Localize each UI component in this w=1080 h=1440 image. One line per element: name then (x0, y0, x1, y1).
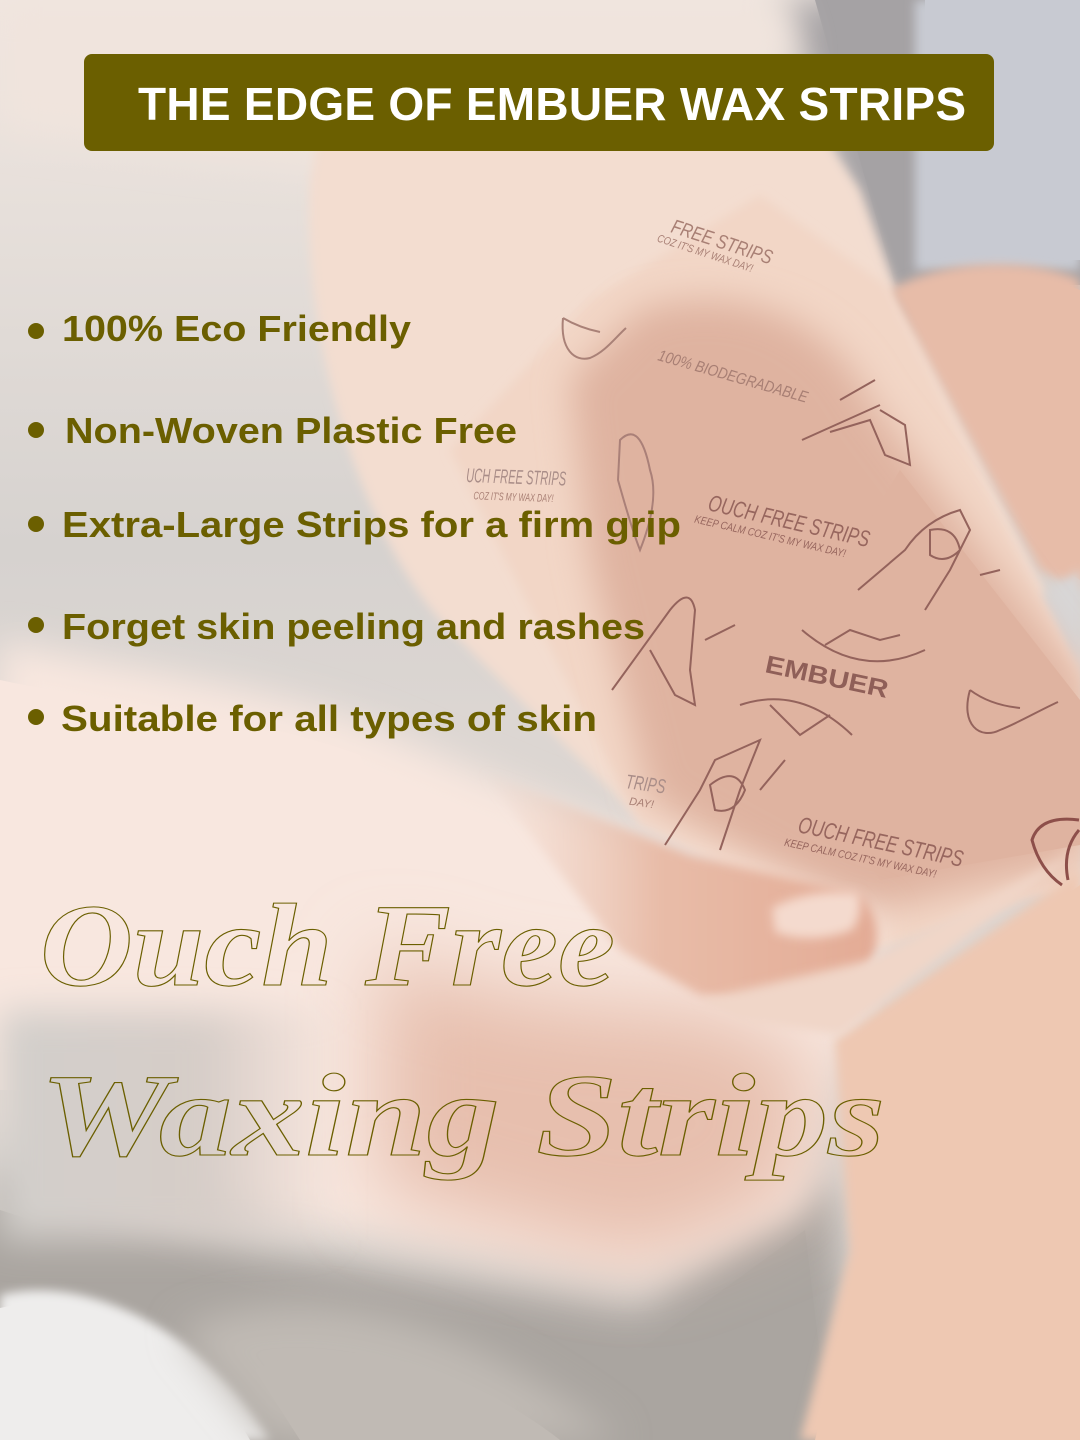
bullet: all skin: Suitable for all types of skin (61, 698, 597, 739)
strip print (465, 213, 1079, 886)
strip text: ouch free strips middle (693, 487, 873, 565)
strip text: ouch free strips top: FREE STRIPS (668, 216, 776, 269)
strip text: left fragment (465, 465, 567, 505)
thumbnail (772, 892, 860, 938)
strip text: ouch free strips lower (783, 809, 966, 886)
title banner (84, 54, 994, 151)
strip text: strips fragment: DAY! (628, 796, 655, 811)
strip text: ouch free strips lower: KEEP CALM COZ IT'S MY WAX DAY! (783, 837, 937, 881)
strip text: ouch free strips top: COZ IT'S MY WAX DAY! (656, 233, 754, 275)
lower right arm (800, 870, 1080, 1440)
icon: leaves upper (802, 630, 925, 661)
strip text: ouch free strips middle: OUCH FREE STRIPS (706, 490, 873, 552)
wax strip (450, 195, 1080, 950)
icon: eye right (967, 690, 1058, 733)
strip text: ouch free strips middle: KEEP CALM COZ IT'S MY WAX DAY! (693, 514, 847, 560)
icon: leg lower (612, 598, 735, 705)
script slogan (40, 880, 885, 1181)
thumb (480, 770, 877, 1015)
title: THE EDGE OF EMBUER WAX STRIPS (138, 78, 966, 130)
slogan line 2: Waxing Strips (40, 1050, 885, 1181)
icon: eye top (563, 318, 626, 359)
icon: partial shape right (1032, 819, 1079, 885)
slogan line 1: Ouch Free (40, 880, 615, 1011)
bullet: plastic free: Non-Woven Plastic Free (65, 410, 517, 451)
strip text: strips fragment: TRIPS (624, 771, 667, 799)
icon: leaves lower (740, 699, 852, 735)
strip text: left fragment: COZ IT'S MY WAX DAY! (473, 490, 554, 505)
icon: underarm top (802, 380, 910, 465)
hand (0, 640, 880, 1275)
strip text: ouch free strips top (656, 213, 776, 280)
strip logo: EMBUER (763, 650, 891, 704)
bullet: eco friendly: 100% Eco Friendly (62, 308, 411, 349)
icon: leg (618, 434, 653, 550)
strip text: biodegradable: 100% BIODEGRADABLE (656, 348, 810, 407)
bullet: extra large: Extra-Large Strips for a firm grip (62, 504, 681, 545)
icon: woman top (858, 510, 1000, 610)
bullet: peeling: Forget skin peeling and rashes (62, 606, 645, 647)
strip text: ouch free strips lower: OUCH FREE STRIPS (796, 811, 966, 872)
icon: woman lower (665, 740, 785, 850)
bullet list (28, 308, 681, 739)
strip text: left fragment: UCH FREE STRIPS (466, 465, 567, 490)
strip text: strips fragment (622, 771, 667, 812)
